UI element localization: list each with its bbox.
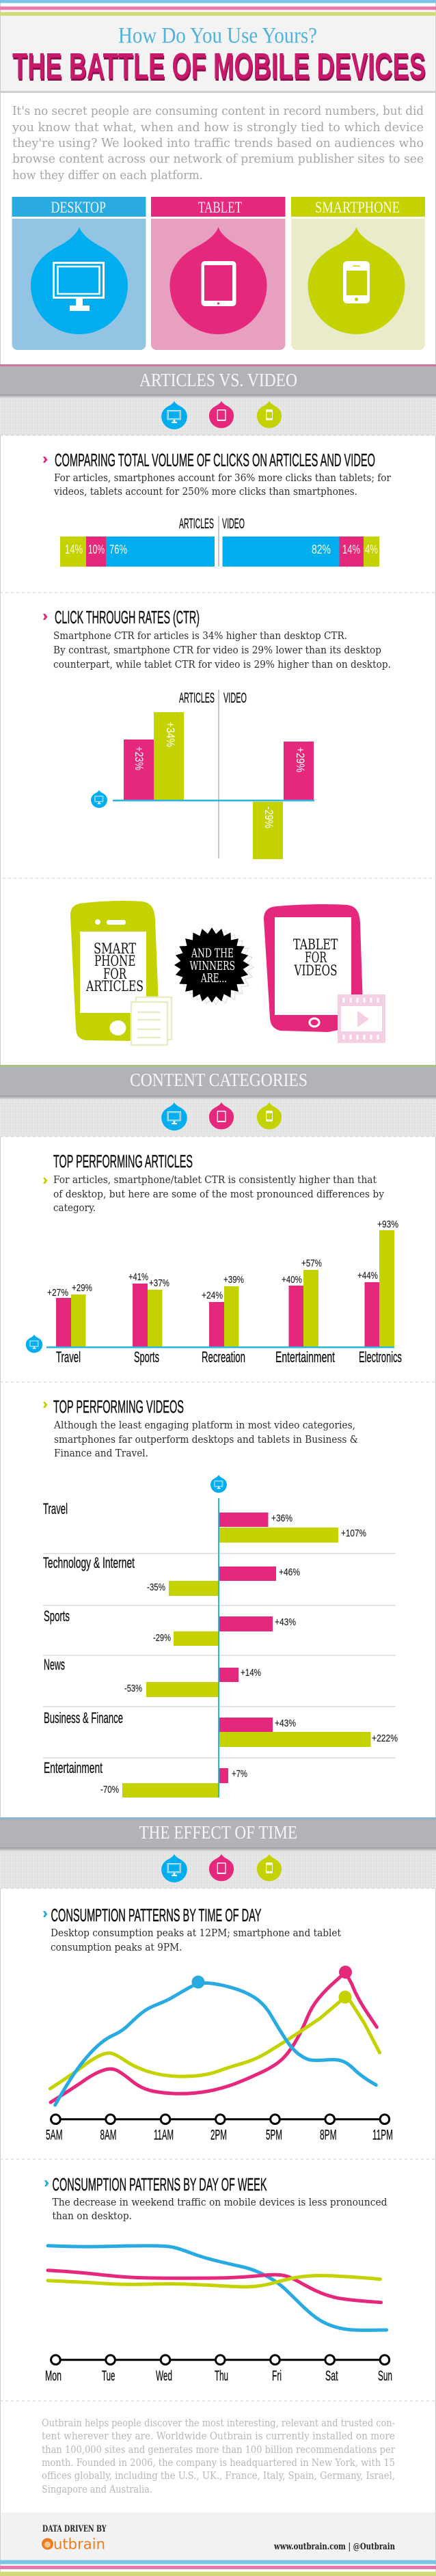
callout: burst: WINNERS [190, 959, 235, 973]
diverging video bar chart: Entertainment [44, 1759, 103, 1776]
heading: CLICK THROUGH RATES (CTR) [55, 607, 200, 627]
header panel [1, 16, 435, 93]
description: Smartphone CTR for articles is 34% higher than desktop CTR. [53, 629, 347, 642]
diverging video bar chart: +7% [232, 1768, 247, 1780]
subtitle: How Do You Use Yours? [118, 23, 317, 48]
diverging video bar chart: -29% [153, 1632, 171, 1644]
line chart: time of day: 5AM [46, 2128, 63, 2143]
description: consumption peaks at 9PM. [51, 1941, 182, 1953]
description [53, 1419, 358, 1459]
diverging video bar chart: +43% [275, 1616, 296, 1628]
CTR bar chart: +29% [294, 747, 307, 772]
diverging video bar chart [43, 1475, 398, 1798]
diverging video bar chart: +107% [341, 1528, 366, 1539]
category bar chart: +27% [47, 1287, 68, 1299]
description: of desktop, but here are some of the most pronounced differences by [53, 1188, 384, 1200]
line chart: day of week [45, 2246, 392, 2384]
icon: tablet winner: TABLET [293, 936, 338, 953]
icon: chevron [43, 457, 48, 463]
icon: tablet winner: FOR [305, 949, 327, 966]
icon: tablet winner [264, 904, 385, 1043]
callout: burst: ARE... [200, 971, 227, 986]
heading: CONSUMPTION PATTERNS BY TIME OF DAY [51, 1905, 261, 1925]
diverging video bar chart: News [44, 1656, 65, 1673]
panel: desktop [12, 197, 146, 350]
category bar chart [26, 1219, 402, 1366]
icon: chevron [43, 1911, 48, 1917]
line chart: day of week: Tue [102, 2368, 115, 2384]
block: top performing articles [26, 1151, 402, 1366]
stacked bar chart: 14% [65, 543, 83, 556]
diverging video bar chart: Sports [44, 1608, 70, 1625]
icon row [161, 401, 282, 429]
heading: TOP PERFORMING ARTICLES [53, 1151, 193, 1171]
block: total volume of clicks [43, 450, 392, 567]
diverging video bar chart: Travel [43, 1500, 68, 1517]
category bar chart: +40% [282, 1274, 302, 1286]
description [53, 1174, 384, 1214]
description [51, 1927, 342, 1953]
intro paragraph: they're using? We looked into traffic trends based on audiences who [12, 136, 424, 150]
line chart: time of day: 8PM [320, 2128, 336, 2143]
block: click through rates [43, 607, 391, 859]
description: category. [53, 1202, 96, 1214]
line chart: day of week: Sun [378, 2368, 392, 2384]
CTR bar chart: +23% [133, 746, 146, 770]
stacked bar chart [60, 516, 379, 567]
heading: TOP PERFORMING VIDEOS [53, 1396, 184, 1417]
panel: desktop: DESKTOP [51, 199, 106, 216]
category bar chart: +37% [149, 1277, 169, 1289]
category bar chart: Travel [56, 1348, 81, 1366]
icon row [161, 1854, 282, 1882]
category bar chart: +57% [301, 1258, 322, 1269]
icon: chevron [43, 614, 48, 620]
diverging video bar chart: +14% [241, 1667, 261, 1679]
block: top performing videos [43, 1396, 398, 1798]
section header: effect of time: THE EFFECT OF TIME [139, 1822, 297, 1843]
intro paragraph: how they differ on each platform. [12, 168, 203, 182]
description: than on desktop. [52, 2210, 132, 2222]
stacked bar chart: 10% [88, 543, 105, 556]
description [53, 472, 392, 498]
description: videos, tablets account for 250% more clicks than smartphones. [53, 485, 357, 498]
about outbrain paragraph: Singapore and Australia. [42, 2483, 152, 2495]
category bar chart: Sports [134, 1348, 159, 1366]
CTR bar chart: -29% [262, 806, 275, 828]
icon: chevron [43, 1402, 48, 1408]
line chart: day of week: Wed [156, 2368, 172, 2384]
description: counterpart, while tablet CTR for video is 29% higher than on desktop. [53, 658, 391, 670]
icon: smartphone winner: ARTICLES [85, 978, 144, 994]
website and handle: www.outbrain.com | @Outbrain [273, 2542, 395, 2552]
icon: smartphone [308, 227, 405, 334]
diverging video bar chart: +43% [275, 1718, 296, 1729]
block: consumption by day of week [44, 2174, 392, 2384]
icon: smartphone winner [70, 901, 172, 1045]
line chart: time of day: 11PM [372, 2128, 393, 2143]
icon: smartphone winner: PHONE [94, 953, 135, 969]
intro paragraph: you know that what, when and how is strongly tied to which device [12, 120, 424, 135]
diverging video bar chart: +46% [279, 1567, 300, 1578]
icon: film strip [338, 994, 385, 1043]
panel: tablet [151, 197, 286, 350]
diverging video bar chart: Technology & Internet [43, 1554, 135, 1571]
description [53, 629, 391, 670]
intro paragraph: browse content across our network of premium publisher sites to see [12, 152, 424, 166]
panel: tablet: TABLET [198, 199, 242, 216]
diverging video bar chart: +222% [372, 1733, 398, 1744]
about outbrain paragraph: than 100,000 sites and generates more than 100 billion recommendations per [42, 2443, 396, 2456]
stacked bar chart: 82% [312, 543, 331, 556]
description: The decrease in weekend traffic on mobile devices is less pronounced [52, 2196, 387, 2208]
diverging video bar chart: -53% [124, 1683, 142, 1694]
heading: CONSUMPTION PATTERNS BY DAY OF WEEK [52, 2174, 267, 2195]
stacked bar chart: 76% [109, 543, 127, 556]
icon row [161, 1102, 282, 1130]
category bar chart: +29% [72, 1282, 92, 1294]
panel: smartphone [291, 197, 425, 350]
about outbrain paragraph: Outbrain helps people discover the most interesting, relevant and trusted con- [42, 2417, 395, 2429]
section header: content categories [0, 1065, 436, 1137]
about outbrain paragraph: offices globally, including the U.S., UK., France, Italy, Spain, Germany, Israel, [42, 2469, 395, 2482]
description: By contrast, smartphone CTR for video is 29% lower than its desktop [53, 644, 381, 656]
category bar chart: +93% [377, 1219, 398, 1230]
about outbrain paragraph [42, 2417, 396, 2495]
intro paragraph [12, 104, 424, 182]
about outbrain paragraph: tent wherever they are. Worldwide Outbrain is currently installed on more [42, 2430, 395, 2442]
category bar chart: Electronics [359, 1348, 402, 1366]
line chart: day of week: Mon [45, 2368, 62, 2384]
bottom colour stripes [0, 2560, 436, 2576]
description: Although the least engaging platform in most video categories, [53, 1419, 355, 1431]
CTR bar chart: VIDEO [223, 690, 247, 706]
section header: articles vs video: ARTICLES VS. VIDEO [139, 370, 297, 390]
section header: articles vs video [0, 364, 436, 435]
CTR bar chart: ARTICLES [179, 690, 215, 706]
line chart: time of day: 8AM [100, 2128, 116, 2143]
block: consumption by time of day [43, 1905, 393, 2143]
data driven by: DATA DRIVEN BY [42, 2524, 107, 2534]
diverging video bar chart: -35% [147, 1582, 165, 1593]
section header: content categories: CONTENT CATEGORIES [130, 1070, 308, 1090]
icon: tablet winner: VIDEOS [294, 962, 338, 979]
line chart: time of day: 11AM [154, 2128, 174, 2143]
icon: chevron [43, 1178, 48, 1184]
line chart: time of day: 5PM [266, 2128, 282, 2143]
icon: smartphone winner: FOR [103, 966, 127, 982]
category bar chart: Entertainment [275, 1348, 335, 1366]
description: For articles, smartphones account for 36% more clicks than tablets; for [54, 472, 392, 484]
line chart: time of day [46, 1966, 393, 2143]
category bar chart: +24% [202, 1290, 223, 1301]
diverging video bar chart: Business & Finance [44, 1709, 123, 1726]
icon: smartphone winner: SMART [94, 940, 136, 957]
footer band [1, 2512, 435, 2560]
icon: desktop [31, 227, 128, 334]
CTR bar chart: +34% [164, 722, 177, 747]
description: Finance and Travel. [54, 1447, 148, 1459]
stacked bar chart: ARTICLES [179, 516, 214, 532]
diverging video bar chart: +36% [271, 1513, 292, 1524]
logo: outbrain: utbrain [53, 2536, 105, 2552]
intro paragraph: It's no secret people are consuming content in record numbers, but did [12, 104, 424, 118]
description: For articles, smartphone/tablet CTR is consistently higher than that [53, 1174, 377, 1186]
line chart: time of day: 2PM [210, 2128, 227, 2143]
callout: burst: AND THE [191, 946, 234, 961]
description: smartphones far outperform desktops and tablets in Business & [54, 1433, 358, 1446]
about outbrain paragraph: month. Founded in 2006, the company is headquartered in New York, with 15 [42, 2456, 395, 2469]
stacked bar chart: 4% [365, 543, 378, 556]
line chart: day of week: Thu [215, 2368, 228, 2384]
icon: document [131, 997, 172, 1045]
CTR bar chart [91, 690, 314, 859]
stacked bar chart: VIDEO [222, 516, 245, 532]
line chart: day of week: Sat [325, 2368, 338, 2384]
stacked bar chart: 14% [342, 543, 360, 556]
category bar chart: Recreation [202, 1348, 245, 1366]
winners illustration [70, 901, 385, 1045]
description: Desktop consumption peaks at 12PM; smartphone and tablet [51, 1927, 342, 1939]
diverging video bar chart: -70% [100, 1784, 119, 1795]
description [52, 2196, 387, 2222]
category bar chart: +41% [128, 1271, 148, 1283]
callout: burst [174, 927, 254, 1005]
category bar chart: +44% [357, 1270, 378, 1282]
top colour stripes [0, 0, 436, 16]
section header: effect of time [0, 1817, 436, 1888]
line chart: day of week: Fri [272, 2368, 282, 2384]
category bar chart: +39% [223, 1274, 244, 1286]
icon: tablet [169, 227, 267, 334]
panel: smartphone: SMARTPHONE [315, 199, 400, 216]
icon: chevron [44, 2180, 49, 2186]
